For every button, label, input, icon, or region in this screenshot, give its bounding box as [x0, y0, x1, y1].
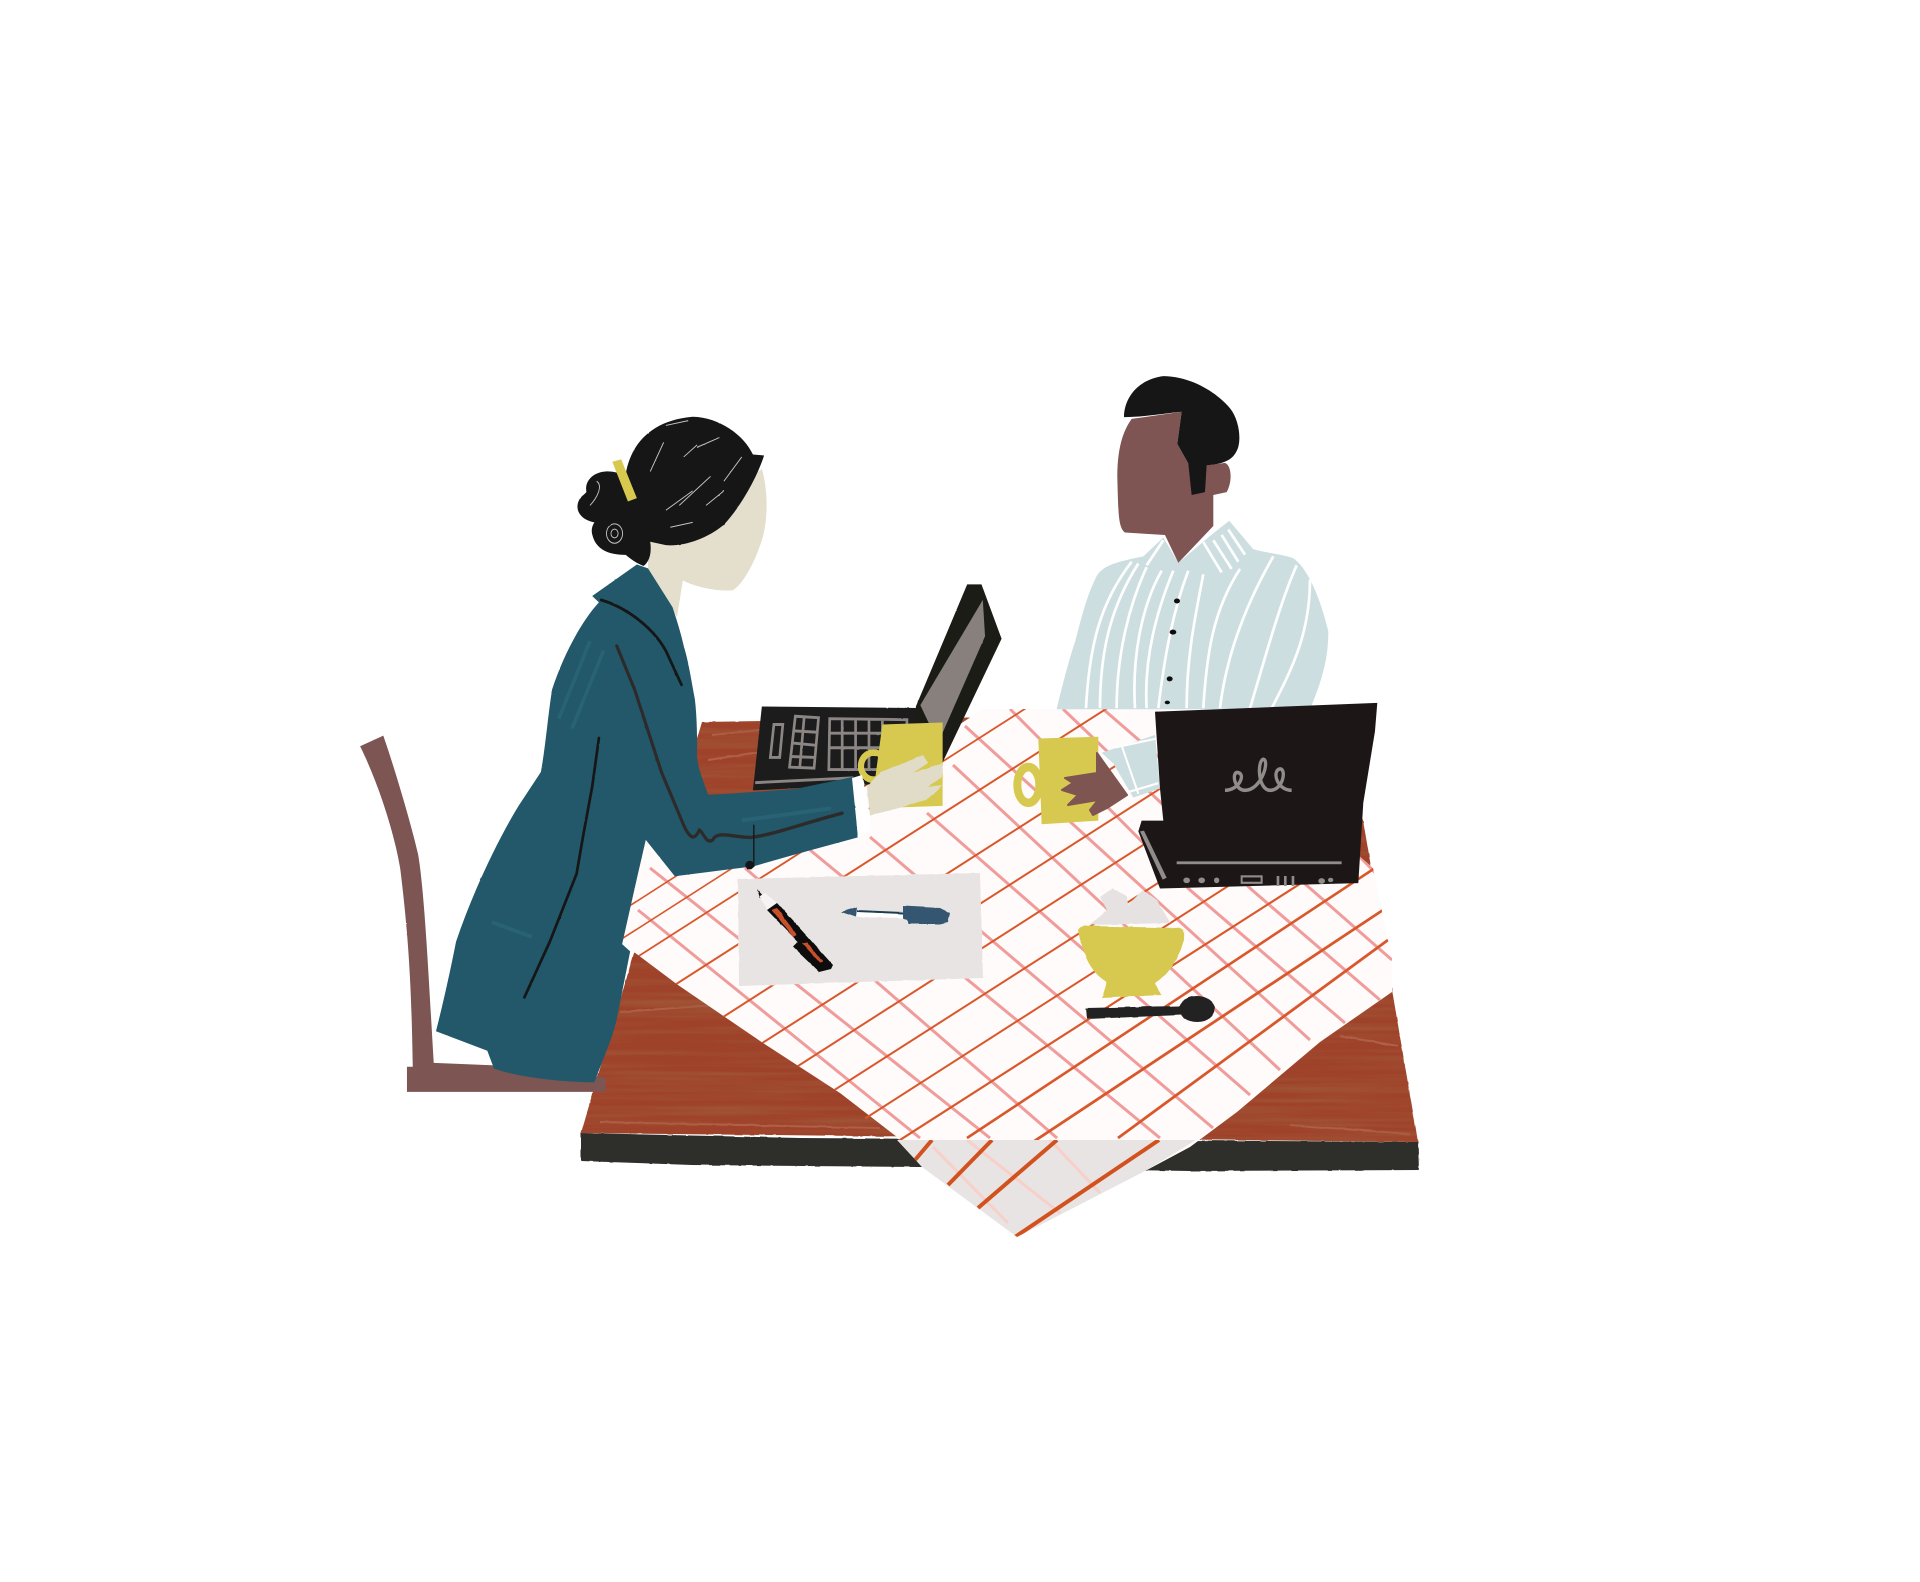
table top: [581, 712, 1418, 1142]
yellow sugar bowl: [1078, 926, 1185, 998]
woman: hair: [577, 417, 764, 566]
woman's chair: [360, 736, 606, 1092]
man: hair: [1124, 376, 1239, 495]
coat shape: [436, 565, 858, 1082]
laptop back, man's side: [1138, 703, 1377, 889]
cloth orange check lines: [623, 709, 1388, 1140]
man: face and neck: [1117, 412, 1231, 563]
laptop, woman's side: [753, 584, 1002, 808]
woman's coat: [436, 565, 858, 1082]
cloth sheet: [622, 709, 1392, 1237]
woman's yellow mug: [861, 723, 943, 808]
laptop screen: [916, 584, 1002, 782]
hand: [867, 755, 942, 815]
illustration: two people at a table: [360, 376, 1420, 1237]
cloth flap over the table edge: [897, 1140, 1196, 1237]
man: hand: [1062, 753, 1127, 815]
cloth pink check lines: [638, 709, 1392, 1138]
woman: face and neck: [648, 469, 767, 617]
sheet of paper: [738, 873, 983, 986]
spoon: [1086, 996, 1215, 1022]
cuff: [852, 775, 871, 837]
man: yellow mug: [1017, 737, 1098, 824]
woman: [577, 417, 767, 617]
woman's hand on mug: [852, 755, 942, 837]
man: striped shirt: [1057, 521, 1328, 709]
man: sleeve cuff: [1102, 735, 1160, 797]
sugar cubes: [1090, 888, 1170, 925]
pen: black marker: [757, 889, 833, 972]
laptop base: [753, 707, 920, 790]
laptop keyboard: [755, 716, 907, 783]
coat highlights: [492, 641, 831, 937]
cloth flap orange lines: [915, 1140, 1159, 1237]
woman: hair clip: [612, 459, 637, 502]
items on the cloth: [738, 873, 1215, 1022]
man: [1017, 376, 1328, 824]
laptop front detail: [1140, 831, 1342, 886]
coat lines: [524, 600, 842, 997]
man: shirt buttons: [1165, 599, 1180, 704]
table front edge: [581, 1133, 1419, 1171]
table wood streaks: [570, 700, 1430, 1150]
laptop logo squiggle: [1225, 759, 1292, 790]
pen: blue capped: [841, 906, 950, 924]
cloth flap pale lines: [933, 1140, 1100, 1223]
tablecloth: [623, 709, 1392, 1237]
